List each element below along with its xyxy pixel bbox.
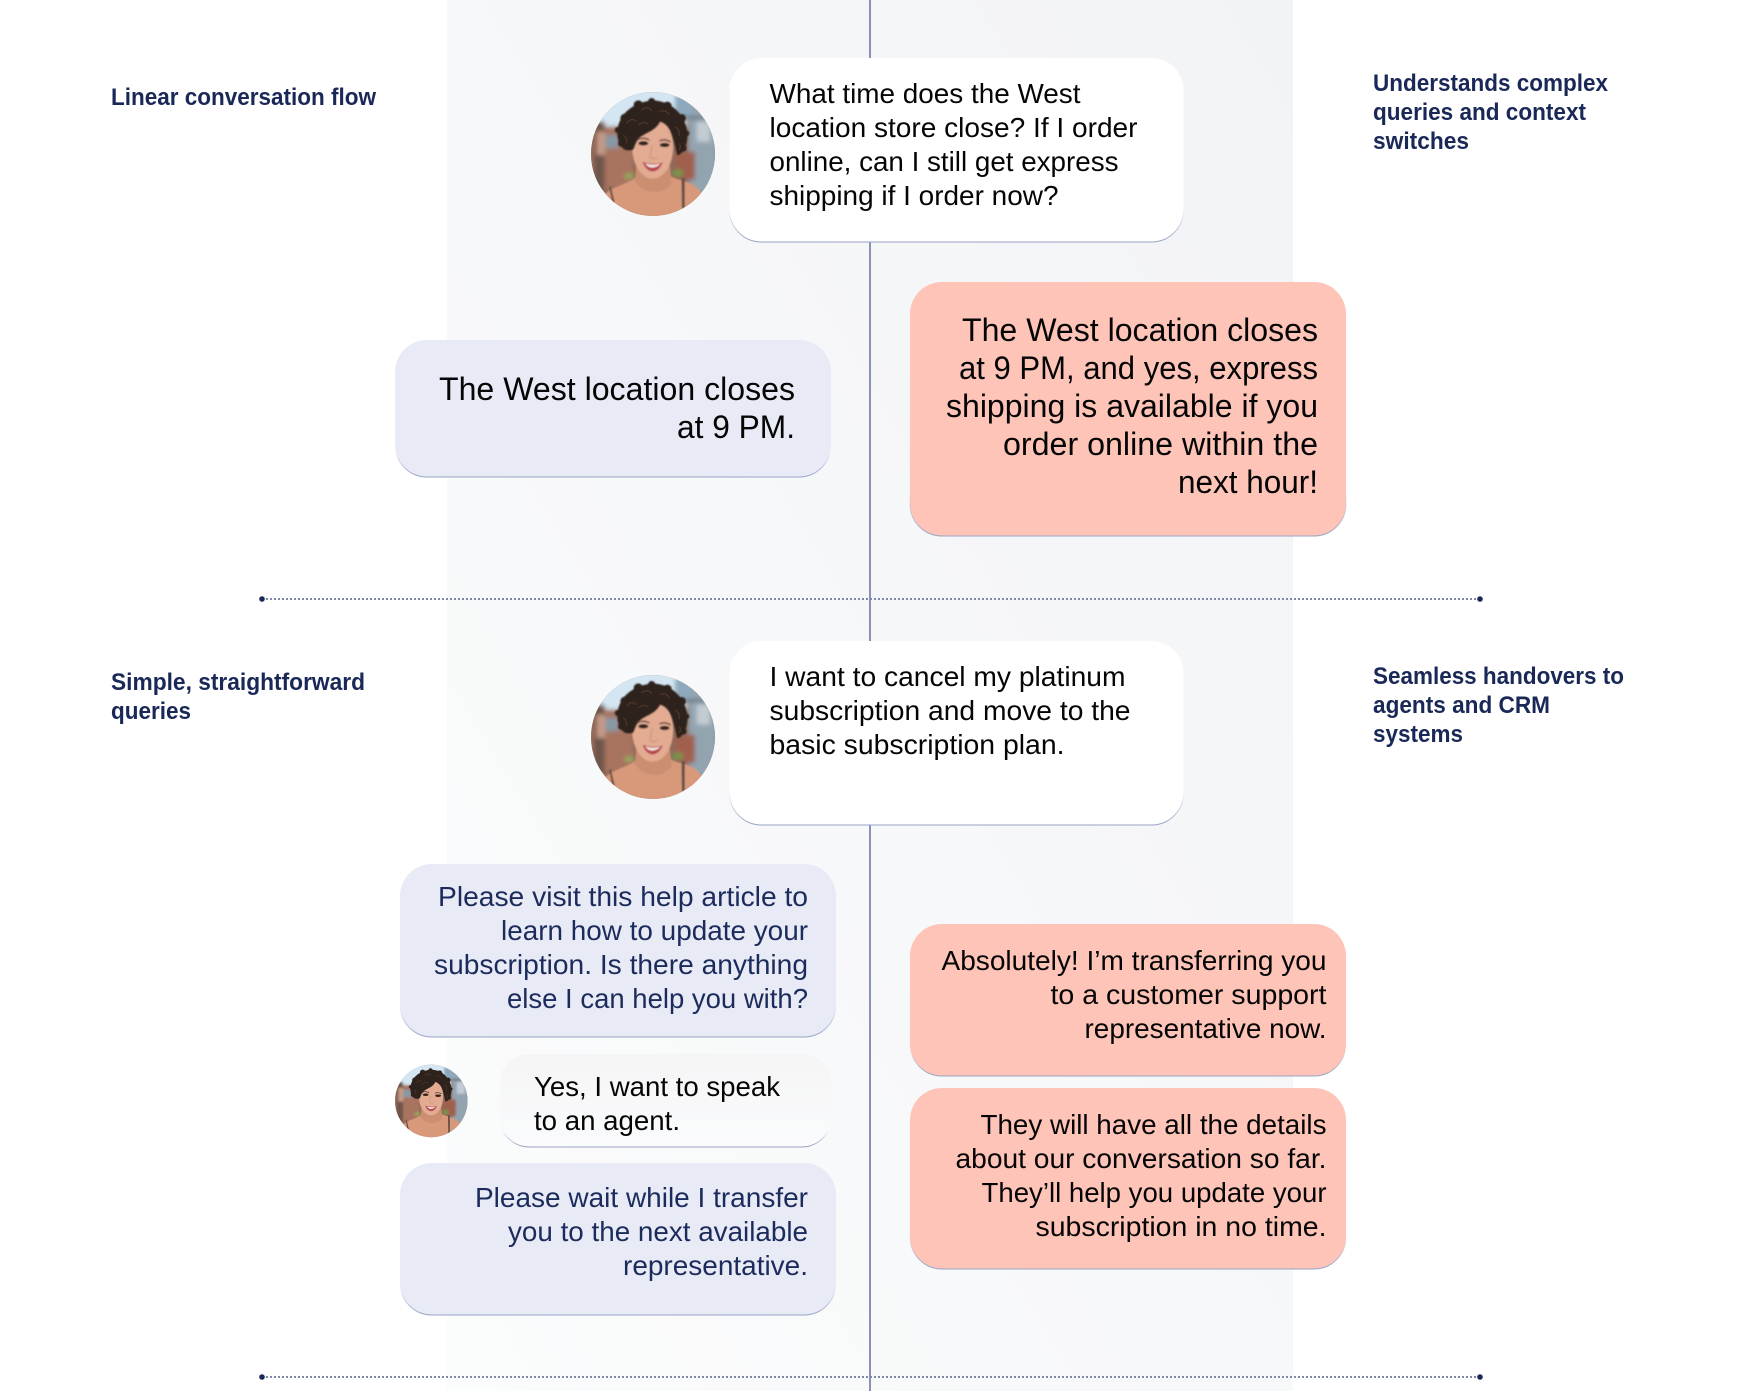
bubble: bot wait reply (400, 1163, 836, 1315)
bubble: customer cancel subscription request: subscription and move to the (770, 695, 1130, 726)
icon: customer avatar, first query (590, 87, 717, 220)
bubble: advanced bot reply: at 9 PM, and yes, express (959, 350, 1318, 386)
bubble: bot help article reply: else I can help you with? (507, 983, 808, 1014)
icon: small customer avatar (394, 1062, 469, 1140)
bubble: advanced bot transfer reply: Absolutely! I’m transferring you (942, 945, 1326, 976)
bubble: advanced bot reply: shipping is available if you (946, 388, 1318, 424)
bubble: customer question about store closing: What time does the West (770, 78, 1081, 109)
label: seamless handovers: systems (1373, 721, 1463, 748)
bubble: advanced bot context reply: They will have all the details (980, 1109, 1326, 1140)
bubble: customer question about store closing (730, 58, 1184, 242)
bubble: bot help article reply: Please visit this help article to (438, 881, 808, 912)
icon: customer avatar, second query (590, 670, 717, 803)
bubble: advanced bot reply: order online within the (1003, 426, 1318, 462)
bubble: advanced bot context reply: subscription in no time. (1036, 1211, 1326, 1242)
bubble: customer asks for agent: Yes, I want to speak (534, 1071, 781, 1102)
label: understands complex queries (1373, 70, 1609, 155)
bubble: advanced bot reply: next hour! (1178, 464, 1318, 500)
label: seamless handovers: Seamless handovers to (1373, 663, 1624, 690)
bubble: customer cancel subscription request: basic subscription plan. (770, 729, 1064, 760)
label: simple queries: queries (111, 698, 191, 725)
label: seamless handovers (1373, 663, 1624, 748)
label: understands complex queries: queries and context (1373, 99, 1586, 126)
bubble: advanced bot transfer reply: to a customer support (1050, 979, 1327, 1010)
bubble: advanced bot reply (910, 282, 1346, 536)
bubble: bot help article reply: subscription. Is there anything (434, 949, 808, 980)
bubble: basic bot reply (395, 340, 831, 477)
bubble: customer cancel subscription request: I want to cancel my platinum (770, 661, 1126, 692)
label: linear conversation flow: Linear conversation flow (111, 84, 376, 111)
bubble: basic bot reply: The West location closes (439, 371, 795, 407)
bubble: bot wait reply: Please wait while I transfer (475, 1182, 808, 1213)
bubble: bot wait reply: representative. (623, 1250, 808, 1281)
label: understands complex queries: Understands complex (1373, 70, 1609, 97)
background panel (447, 0, 1293, 1391)
bubble: customer question about store closing: location store close? If I order (770, 112, 1138, 143)
bubble: advanced bot reply: The West location closes (962, 312, 1318, 348)
bubble: advanced bot context reply: They’ll help you update your (982, 1177, 1326, 1208)
bubble: advanced bot transfer reply: representative now. (1084, 1013, 1326, 1044)
bubble: customer cancel subscription request (730, 641, 1184, 825)
bubble: bot help article reply (400, 864, 836, 1037)
bubble: basic bot reply: at 9 PM. (677, 409, 795, 445)
vertical divider line (869, 0, 871, 1391)
bubble: advanced bot context reply: about our conversation so far. (956, 1143, 1326, 1174)
bubble: customer question about store closing: shipping if I order now? (770, 180, 1058, 211)
label: understands complex queries: switches (1373, 128, 1469, 155)
dotted separator: bottom (259, 1374, 1483, 1380)
bubble: bot wait reply: you to the next available (508, 1216, 808, 1247)
bubble: bot help article reply: learn how to update your (501, 915, 808, 946)
dotted separator: top (259, 596, 1483, 602)
bubble: customer asks for agent (500, 1054, 832, 1147)
bubble: advanced bot transfer reply (910, 924, 1346, 1076)
bubble: customer question about store closing: online, can I still get express (770, 146, 1118, 177)
bubble: advanced bot context reply (910, 1088, 1346, 1269)
label: simple queries: Simple, straightforward (111, 669, 365, 696)
label: seamless handovers: agents and CRM (1373, 692, 1550, 719)
label: simple queries (111, 669, 365, 725)
bubble: customer asks for agent: to an agent. (534, 1105, 680, 1136)
